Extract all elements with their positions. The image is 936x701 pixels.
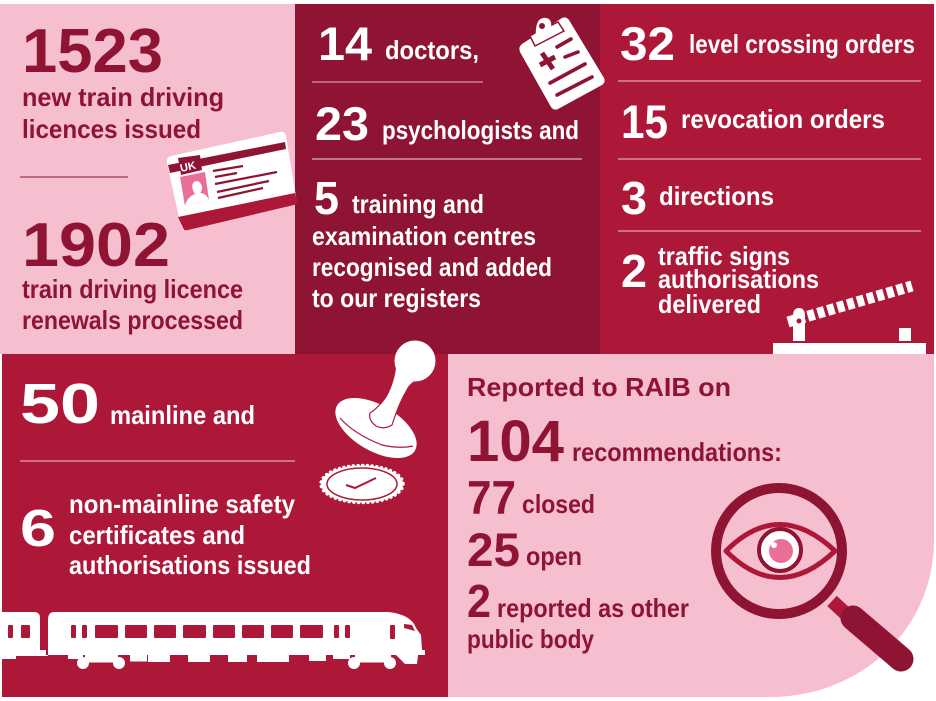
stat: 104 recommendations xyxy=(467,409,782,474)
stat: 15 revocation orders xyxy=(621,95,885,148)
stat: 77 closed xyxy=(467,471,595,524)
icon: level crossing barrier xyxy=(773,286,926,354)
stat: 32 level crossing orders xyxy=(620,17,915,70)
stat: 25 open: 25 xyxy=(467,523,520,576)
stat: 1523 new licences: licences issued xyxy=(22,114,201,144)
stat: 1523 new licences: new train driving xyxy=(22,82,224,112)
stat: 14 doctors: doctors, xyxy=(385,35,479,65)
icon: clipboard xyxy=(519,17,605,110)
icon: UK licence card xyxy=(167,132,297,230)
stat: 5 training centres: to our registers xyxy=(312,283,481,313)
stat: 2 traffic signs authorisations xyxy=(621,241,819,319)
panel: safety certificates xyxy=(2,340,448,697)
stat: 2 traffic signs authorisations: traffic signs xyxy=(658,241,790,271)
panel: train driving licences xyxy=(0,4,295,354)
stat: 5 training centres: examination centres xyxy=(312,221,536,251)
stat: 5 training centres xyxy=(312,172,552,313)
stat: 2 traffic signs authorisations: 2 xyxy=(621,245,647,297)
stat: 1523 new licences: 1523 xyxy=(22,17,163,86)
stat: 2 other public body: 2 xyxy=(467,575,491,627)
stat: 32 level crossing orders: 32 xyxy=(620,17,675,70)
stat: 104 recommendations: 104 xyxy=(467,409,564,474)
panel: doctors, psychologists and centres xyxy=(295,4,600,354)
stat: 104 recommendations: recommendations: xyxy=(572,437,782,467)
stat: 5 training centres: 5 xyxy=(314,172,339,224)
stat: 3 directions: directions xyxy=(659,181,774,211)
stat: 23 psychologists xyxy=(315,97,579,150)
stat: 6 non-mainline: 6 xyxy=(20,500,56,558)
stat: 5 training centres: recognised and added xyxy=(312,252,552,282)
icon: rubber stamp xyxy=(321,340,436,502)
stat: 14 doctors: 14 xyxy=(318,17,372,70)
stat: 25 open: open xyxy=(526,541,582,571)
icon: train xyxy=(2,612,425,669)
icon: UK licence card: UK xyxy=(179,160,197,175)
stat: 23 psychologists: psychologists and xyxy=(382,115,579,145)
stat: 3 directions xyxy=(621,172,774,224)
stat: 1902 renewals: 1902 xyxy=(22,211,170,280)
stat: 23 psychologists: 23 xyxy=(315,97,369,150)
stat: 77 closed: 77 xyxy=(467,471,516,524)
stat: 50 mainline: mainline and xyxy=(110,400,255,430)
heading: reported to RAIB: Reported to RAIB on xyxy=(467,372,731,402)
stat: 15 revocation orders: revocation orders xyxy=(681,104,885,134)
stat: 2 other public body: reported as other xyxy=(497,593,689,623)
icon: magnifying glass with eye xyxy=(716,488,901,659)
stat: 1902 renewals: train driving licence xyxy=(22,274,243,304)
stat: 50 mainline xyxy=(20,372,255,436)
stat: 14 doctors xyxy=(318,17,479,70)
stat: 6 non-mainline: non-mainline safety xyxy=(69,489,295,519)
stat: 6 non-mainline xyxy=(20,489,311,580)
stat: 2 traffic signs authorisations: delivered xyxy=(658,289,761,319)
stat: 3 directions: 3 xyxy=(621,172,647,224)
stat: 1523 new licences xyxy=(22,17,224,144)
stat: 5 training centres: training and xyxy=(352,189,484,219)
stat: 50 mainline: 50 xyxy=(20,372,100,436)
panel: reported to RAIB xyxy=(448,354,934,697)
stat: 1902 renewals: renewals processed xyxy=(22,305,243,335)
panel: orders and directions xyxy=(600,4,934,354)
stat: 2 traffic signs authorisations: authorisations xyxy=(658,264,819,294)
stat: 6 non-mainline: certificates and xyxy=(69,520,245,550)
stat: 15 revocation orders: 15 xyxy=(621,95,668,148)
stat: 6 non-mainline: authorisations issued xyxy=(69,550,311,580)
stat: 2 other public body xyxy=(467,575,689,654)
stat: 2 other public body: public body xyxy=(467,624,594,654)
stat: 77 closed: closed xyxy=(522,489,595,519)
stat: 1902 renewals xyxy=(22,211,243,335)
stat: 25 open xyxy=(467,523,582,576)
